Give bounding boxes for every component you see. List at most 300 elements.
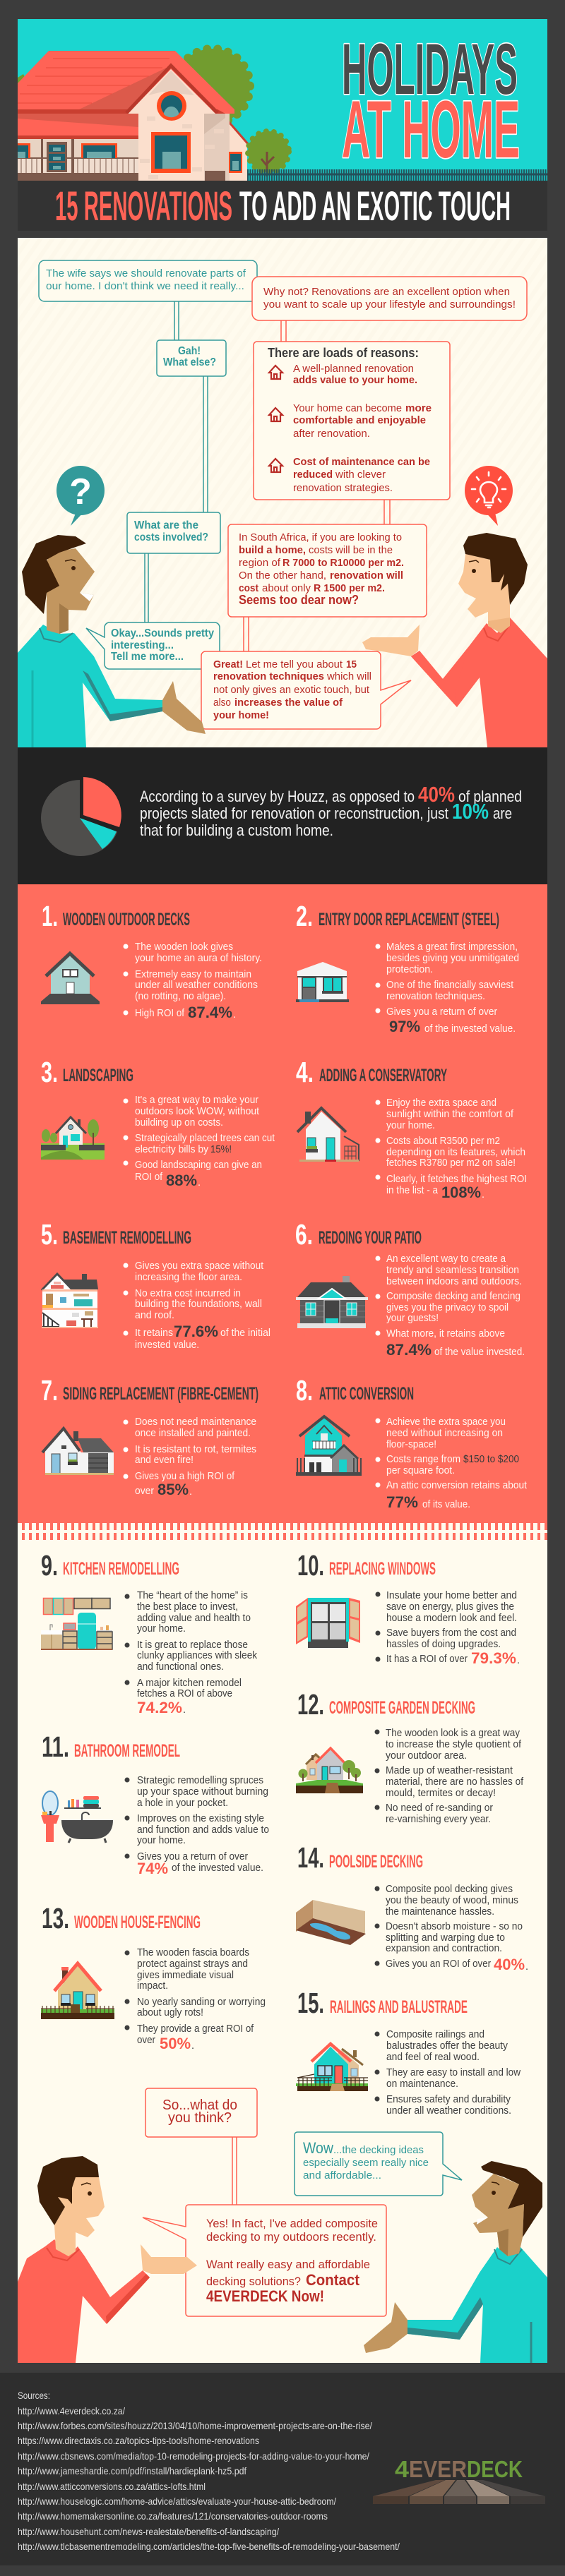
bullets: .: [189, 1486, 192, 1498]
icon: grey house: [296, 1276, 368, 1328]
title: [342, 29, 520, 175]
bullets: Save buyers from the cost and: [386, 1627, 516, 1639]
bullets: [124, 1590, 258, 1716]
icon: garden house: [296, 1748, 363, 1793]
icon: question bubble: ?: [69, 471, 92, 512]
bullets: and functional ones.: [137, 1661, 224, 1673]
bullets: sunlight within the comfort of: [386, 1109, 514, 1120]
callout: reasons: renovation strategies.: [293, 482, 393, 494]
item 2: entry door replacement: 2.: [296, 900, 313, 932]
item 13: wooden house-fencing: WOODEN HOUSE-FENCING: [74, 1913, 201, 1932]
panel: conversation: [18, 238, 547, 747]
item 4: adding a conservatory: [296, 1056, 527, 1201]
bullets: impact.: [137, 1980, 168, 1992]
icon: house with conservatory: [297, 1108, 359, 1162]
text: survey statistic: projects slated for renovation or reconstruction, just: [140, 805, 448, 822]
callout: reasons: comfortable and enjoyable: [293, 414, 426, 426]
bullets: [374, 1884, 528, 1973]
bullets: between indoors and outdoors.: [386, 1276, 522, 1287]
item 5: basement remodelling: [41, 1218, 270, 1351]
item 7: siding replacement: 7.: [41, 1374, 58, 1407]
text: survey statistic: of planned: [458, 788, 522, 805]
bullets: outdoors look WOW, without: [135, 1106, 259, 1117]
bullets: Ensures safety and durability: [386, 2094, 511, 2105]
bullets: up your space without burning: [137, 1786, 268, 1798]
bullets: The wooden look is a great way: [386, 1728, 521, 1739]
callout: south africa costs: Seems too dear now?: [239, 593, 359, 607]
item 11: bathroom remodel: [41, 1731, 269, 1877]
item 12: composite garden decking: 12.: [297, 1688, 324, 1721]
bullets: protect against strays and: [137, 1958, 248, 1970]
bullets: Does not need maintenance: [135, 1416, 256, 1428]
speech: okay sounds pretty interesting: Tell me more...: [111, 651, 184, 663]
bullets: [376, 941, 519, 1035]
bullets: of the value invested.: [434, 1347, 525, 1358]
bullets: building up on costs.: [135, 1117, 223, 1128]
bullets: of its value.: [422, 1499, 470, 1510]
item 2: entry door replacement: [296, 900, 519, 1035]
bullets: hassles of doing upgrades.: [386, 1639, 501, 1650]
connector: [244, 617, 249, 651]
bullets: One of the financially savviest: [386, 980, 513, 991]
bullets: Gives you a high ROI of: [135, 1471, 235, 1482]
callout: reasons: A well-planned renovation: [293, 363, 414, 375]
item 5: basement remodelling: BASEMENT REMODELLING: [63, 1228, 191, 1248]
item 8: attic conversion: 8.: [296, 1374, 313, 1407]
item 7: siding replacement: SIDING REPLACEMENT (FIBRE-CEMENT): [63, 1384, 258, 1404]
bullets: (no rotting, no algae).: [135, 991, 226, 1002]
callout: reasons: There are loads of reasons:: [268, 346, 419, 360]
sources list: http://www.jameshardie.com/pdf/install/hardieplank-hz5.pdf: [18, 2465, 246, 2476]
bullets: .: [198, 1177, 201, 1188]
bullets: .: [191, 2040, 194, 2052]
sources list: http://www.4everdeck.co.za/: [18, 2405, 125, 2416]
speech: gah: [157, 340, 226, 376]
text: survey statistic: According to a survey by Houzz, as opposed to: [140, 788, 415, 805]
bullets: adding value and health to: [137, 1613, 251, 1624]
callout: south africa costs: R 7000 to R10000 per m2.: [282, 557, 404, 569]
bullets: [376, 1253, 525, 1359]
bullets: invested value.: [135, 1340, 199, 1351]
callout: reasons: with clever: [335, 469, 386, 481]
bullets: fetches a ROI of above: [137, 1688, 232, 1699]
subtitle band: 15 RENOVATIONS: [55, 183, 232, 229]
bullets: to increase the style quotient of: [386, 1739, 522, 1750]
speech: great 15 techniques: your home!: [213, 709, 269, 721]
bullets: Costs about R3500 per m2: [386, 1136, 500, 1147]
bullets: under all weather conditions: [135, 980, 258, 991]
item 8: attic conversion: ATTIC CONVERSION: [319, 1384, 414, 1404]
bullets: [123, 1260, 270, 1351]
speech: wow the decking ideas: ...the decking ideas: [333, 2144, 424, 2156]
callout: south africa costs: In South Africa, if you are looking to: [239, 531, 402, 543]
speech: okay sounds pretty interesting: interesting...: [111, 639, 174, 651]
text: survey statistic: [140, 782, 522, 839]
sources list: http://www.househunt.com/news-realestate/benefits-of-landscaping/: [18, 2526, 279, 2537]
item 3: landscaping: [41, 1056, 275, 1189]
bullets: and roof.: [135, 1310, 174, 1321]
bullets: [123, 1416, 256, 1498]
bullets: [374, 2029, 521, 2117]
speech: yes contact 4everdeck: decking to my outdoors recently.: [206, 2230, 376, 2244]
bullets: mould, termites or decay!: [386, 1788, 496, 1799]
sources list: http://www.cbsnews.com/media/top-10-remodeling-projects-for-adding-value-to-your-home/: [18, 2450, 369, 2462]
sources list: https://www.directaxis.co.za/topics-tips-tools/home-renovations: [18, 2435, 259, 2446]
text: survey statistic: 10%: [452, 799, 489, 824]
bullets: of the initial: [220, 1328, 270, 1339]
bullets: of the invested value.: [172, 1862, 263, 1874]
bullets: .: [233, 1009, 236, 1021]
bullets: 74%: [137, 1860, 168, 1877]
icon: bathroom: [41, 1791, 113, 1843]
bullets: your guests!: [386, 1313, 439, 1324]
speech: yes contact 4everdeck: Yes! In fact, I've added composite: [206, 2217, 378, 2230]
logo: 4everdeck: [373, 2456, 545, 2504]
item 5: basement remodelling: 5.: [41, 1218, 58, 1251]
icon: kitchen: [41, 1598, 112, 1650]
callout: reasons: reduced: [293, 469, 333, 481]
speech: great 15 techniques: increases the value of: [234, 697, 343, 709]
bullets: your outdoor area.: [386, 1750, 467, 1762]
person: man in red shirt: [362, 533, 547, 747]
bullets: .: [183, 1704, 186, 1716]
speech: yes contact 4everdeck: Contact: [306, 2271, 360, 2289]
callout: reasons: Your home can become: [293, 402, 402, 414]
bullets: [376, 1416, 527, 1511]
bullets: Good landscaping can give an: [135, 1160, 262, 1171]
connector: [281, 320, 286, 342]
speech: wow the decking ideas: and affordable...: [303, 2169, 381, 2181]
text: survey statistic: that for building a custom home.: [140, 821, 333, 839]
bullets: your home.: [137, 1835, 186, 1846]
item 3: landscaping: 3.: [41, 1056, 58, 1088]
icon: house: [269, 366, 282, 379]
bullets: your home.: [386, 1120, 435, 1131]
bullets: Made up of weather-resistant: [386, 1765, 513, 1776]
bullets: 77.6%: [174, 1323, 218, 1340]
bullets: you the beauty of wood, minus: [386, 1895, 518, 1906]
bullets: It's a great way to make your: [135, 1095, 258, 1106]
icon: house: [269, 459, 282, 472]
bullets: building the foundations, wall: [135, 1299, 262, 1310]
bullets: They provide a great ROI of: [137, 2023, 254, 2035]
bullets: $150 to $200: [463, 1454, 519, 1465]
speech: why not: [252, 277, 527, 320]
bullets: about ugly rots!: [137, 2007, 203, 2018]
callout: south africa costs: cost: [239, 582, 258, 594]
bullets: [123, 941, 262, 1021]
speech: okay sounds pretty interesting: [86, 622, 220, 669]
bullets: [123, 1095, 275, 1189]
bullets: per square foot.: [386, 1465, 455, 1476]
bullets: house a modern look and feel.: [386, 1613, 517, 1624]
bullets: 77%: [386, 1493, 418, 1511]
bullets: depending on its features, which: [386, 1147, 525, 1158]
sources list: http://www.homemakersonline.co.za/features/121/conservatories-outdoor-rooms: [18, 2510, 328, 2522]
bullets: It has a ROI of over: [386, 1654, 468, 1665]
bullets: [376, 1590, 520, 1667]
bullets: 15%!: [210, 1144, 232, 1155]
logo: 4everdeck: 4: [395, 2456, 410, 2482]
callout: south africa costs: region of: [239, 557, 281, 569]
item 9: kitchen remodelling: [41, 1549, 258, 1716]
bullets: [376, 1097, 527, 1201]
speech: the wife says: The wife says we should renovate parts of: [46, 267, 246, 279]
bullets: An excellent way to create a: [386, 1253, 506, 1265]
panel: renovations 1 to 8: [18, 884, 547, 1540]
bullets: under all weather conditions.: [386, 2105, 511, 2117]
sources list: http://www.houselogic.com/home-advice/attics/evaluate-your-house-attic-bedroom/: [18, 2496, 336, 2507]
bullets: Extremely easy to maintain: [135, 969, 251, 980]
callout: reasons: Cost of maintenance can be: [293, 456, 430, 468]
bullets: 108%: [441, 1184, 481, 1201]
connector: [232, 2137, 237, 2205]
icon: fenced house: [41, 1963, 114, 2019]
item 14: poolside decking: 14.: [297, 1841, 324, 1874]
speech: gah: Gah!: [178, 345, 201, 357]
text: survey statistic: are: [493, 805, 512, 822]
connector: [174, 301, 179, 340]
bullets: gives immediate visual: [137, 1970, 234, 1981]
speech: wow the decking ideas: [295, 2132, 462, 2196]
item 4: adding a conservatory: 4.: [296, 1056, 314, 1088]
bullets: .: [517, 1655, 520, 1666]
item 12: composite garden decking: [296, 1688, 524, 1825]
speech: great 15 techniques: renovation techniques: [213, 670, 324, 682]
bullets: need without increasing on: [386, 1428, 503, 1439]
item 1: wooden outdoor decks: WOODEN OUTDOOR DECKS: [63, 910, 190, 929]
speech: great 15 techniques: Let me tell you about: [246, 658, 343, 670]
bullets: Composite decking and fencing: [386, 1291, 521, 1302]
bullets: Achieve the extra space you: [386, 1416, 506, 1428]
connector: [145, 553, 148, 622]
bullets: 87.4%: [386, 1341, 432, 1359]
speech: so what do you think: you think?: [168, 2110, 232, 2126]
connector: [203, 376, 208, 512]
bullets: Gives you extra space without: [135, 1260, 263, 1272]
speech: wow the decking ideas: especially seem really nice: [303, 2157, 429, 2169]
icon: house with garage: [42, 1428, 114, 1475]
bullets: Strategic remodelling spruces: [137, 1775, 263, 1786]
speech: wow the decking ideas: Wow: [303, 2139, 333, 2157]
bullets: and feel of real wood.: [386, 2052, 480, 2063]
bullets: An attic conversion retains about: [386, 1480, 527, 1491]
bullets: 40%: [494, 1956, 525, 1973]
bullets: once installed and painted.: [135, 1428, 251, 1439]
bullets: fetches R3780 per m2 on sale!: [386, 1157, 516, 1169]
bullets: It retains: [135, 1328, 173, 1339]
bullets: and even fire!: [135, 1455, 194, 1466]
item 11: bathroom remodel: BATHROOM REMODEL: [74, 1741, 180, 1761]
bullets: What more, it retains above: [386, 1328, 505, 1340]
bullets: floor-space!: [386, 1439, 436, 1450]
speech: why not: you want to scale up your lifestyle and surroundings!: [263, 299, 516, 311]
pie chart: [41, 777, 127, 856]
item 10: replacing windows: [296, 1549, 520, 1667]
item 6: redoing your patio: 6.: [295, 1218, 313, 1251]
bullets: Gives you a return of over: [386, 1006, 497, 1018]
icon: house cutaway: [42, 1274, 98, 1328]
bullets: .: [525, 1961, 528, 1973]
person: man in teal shirt, bottom: [364, 2161, 547, 2363]
bullets: renovation techniques.: [386, 991, 485, 1002]
speech: yes contact 4everdeck: 4EVERDECK Now!: [206, 2287, 324, 2305]
bullets: 97%: [389, 1018, 420, 1035]
bullets: It is resistant to rot, termites: [135, 1444, 256, 1455]
bullets: trendy and seamless transition: [386, 1265, 519, 1276]
bullets: material, there are no hassles of: [386, 1776, 524, 1788]
callout: south africa costs: R 1500 per m2.: [314, 582, 385, 594]
bullets: [124, 1775, 269, 1877]
bullets: ROI of: [135, 1172, 163, 1183]
panel: renovations 9 to 15: [18, 1523, 547, 2363]
bullets: No extra cost incurred in: [135, 1288, 241, 1299]
bullets: splitting and warping due to: [386, 1932, 505, 1944]
person: man in red shirt, bottom: [18, 2156, 197, 2363]
speech: great 15 techniques: which will: [326, 670, 371, 682]
sources list: http://www.tlcbasementremodeling.com/articles/the-top-five-benefits-of-remodeling-your-basement/: [18, 2541, 400, 2552]
item 9: kitchen remodelling: 9.: [41, 1549, 58, 1582]
speech: so what do you think: So...what do: [162, 2097, 237, 2113]
bullets: your home.: [137, 1623, 186, 1635]
bullets: a hole in your pocket.: [137, 1798, 228, 1809]
speech: great 15 techniques: 15: [346, 658, 357, 670]
sources list: Sources:: [18, 2390, 50, 2401]
bullets: gives you the privacy to spoil: [386, 1302, 509, 1313]
item 6: redoing your patio: REDOING YOUR PATIO: [319, 1228, 422, 1248]
icon: pool deck: [296, 1900, 366, 1945]
panel: survey: [18, 747, 547, 884]
bullets: A major kitchen remodel: [137, 1678, 242, 1689]
sources list: [18, 2390, 400, 2552]
sources list: http://www.forbes.com/sites/houzz/2013/04/10/home-improvement-projects-are-on-the-rise/: [18, 2420, 372, 2431]
bullets: Costs range from: [386, 1454, 460, 1465]
item 4: adding a conservatory: ADDING A CONSERVATORY: [319, 1066, 447, 1085]
subtitle band: [18, 181, 547, 231]
bullets: electricity bills by: [135, 1144, 209, 1155]
bullets: No yearly sanding or worrying: [137, 1997, 266, 2008]
callout: reasons: adds value to your home.: [293, 374, 417, 386]
bullets: Clearly, it fetches the highest ROI: [386, 1174, 527, 1185]
item 14: poolside decking: [296, 1841, 528, 1973]
bullets: 74.2%: [137, 1699, 182, 1716]
bullets: Insulate your home better and: [386, 1590, 517, 1601]
bullets: expansion and contraction.: [386, 1943, 502, 1954]
bullets: 85%: [157, 1481, 189, 1498]
bullets: the maintenance hassles.: [386, 1906, 494, 1918]
bullets: Composite pool decking gives: [386, 1884, 513, 1895]
icon: blue house: [41, 953, 100, 1004]
bullets: balustrades offer the beauty: [386, 2040, 509, 2052]
icon: house: [269, 408, 282, 421]
bullets: Strategically placed trees can cut: [135, 1133, 275, 1144]
text: survey statistic: 40%: [418, 782, 455, 807]
item 3: landscaping: LANDSCAPING: [63, 1066, 133, 1085]
speech: what are the costs: [127, 512, 220, 553]
bullets: on maintenance.: [386, 2078, 458, 2090]
sources list: http://www.atticconversions.co.za/attics-lofts.html: [18, 2481, 206, 2492]
speech: okay sounds pretty interesting: Okay...Sounds pretty: [111, 627, 214, 639]
item 8: attic conversion: [296, 1374, 527, 1511]
icon: house with railings: [296, 2044, 368, 2091]
bullets: Improves on the existing style: [137, 1813, 264, 1824]
speech: great 15 techniques: not only gives an exotic touch, but: [213, 684, 370, 696]
callout: south africa costs: about only: [262, 582, 311, 594]
item 1: wooden outdoor decks: 1.: [42, 900, 58, 932]
person: man in teal shirt: [18, 535, 206, 747]
bullets: Enjoy the extra space and: [386, 1097, 496, 1109]
speech: the wife says: our home. I don't think we need it really...: [46, 280, 244, 292]
callout: reasons: more: [405, 402, 432, 414]
icon: lightbulb bubble: [465, 466, 513, 526]
bullets: of the invested value.: [424, 1023, 516, 1035]
item 10: replacing windows: 10.: [297, 1549, 324, 1582]
bullets: 87.4%: [188, 1004, 232, 1021]
header panel: [18, 19, 547, 181]
bullets: [124, 1947, 266, 2052]
bullets: No need of re-sanding or: [386, 1802, 493, 1814]
item 13: wooden house-fencing: [41, 1902, 266, 2052]
speech: yes contact 4everdeck: decking solutions?: [206, 2275, 301, 2288]
bullets: over: [137, 2035, 155, 2046]
item 7: siding replacement: [41, 1374, 258, 1498]
logo: 4everdeck: DECK: [467, 2456, 523, 2482]
callout: south africa costs: costs will be in the: [309, 544, 393, 556]
bullets: The wooden fascia boards: [137, 1947, 249, 1958]
bullets: 79.3%: [471, 1649, 516, 1667]
speech: great 15 techniques: [201, 651, 411, 729]
bullets: Gives you an ROI of over: [386, 1958, 491, 1970]
icon: teal house with attic balcony: [296, 1416, 362, 1476]
item 6: redoing your patio: [295, 1218, 525, 1359]
bullets: clunky appliances with sleek: [137, 1650, 258, 1661]
speech: yes contact 4everdeck: [143, 2205, 386, 2316]
item 14: poolside decking: POOLSIDE DECKING: [329, 1852, 423, 1872]
item 9: kitchen remodelling: KITCHEN REMODELLING: [63, 1559, 179, 1579]
bullets: Makes a great first impression,: [386, 941, 518, 953]
item 15: railings and balustrade: 15.: [297, 1987, 324, 2019]
speech: why not: Why not? Renovations are an excellent option when: [263, 286, 510, 298]
bullets: 50%: [160, 2035, 191, 2052]
callout: reasons: after renovation.: [293, 428, 370, 440]
bullets: The wooden look gives: [135, 941, 233, 953]
bullets: Doesn't absorb moisture - so no: [386, 1921, 523, 1932]
bullets: your home an aura of history.: [135, 953, 262, 964]
bullets: .: [482, 1189, 484, 1200]
bullets: protection.: [386, 964, 433, 975]
bullets: over: [135, 1486, 154, 1497]
item 13: wooden house-fencing: 13.: [42, 1902, 69, 1934]
bullets: the best place to invest,: [137, 1601, 238, 1613]
bullets: 88%: [166, 1172, 197, 1189]
speech: gah: What else?: [163, 356, 216, 368]
bullets: They are easy to install and low: [386, 2067, 521, 2078]
callout: south africa costs: [228, 524, 427, 617]
bullets: Gives you a return of over: [137, 1851, 248, 1862]
bullets: besides giving you unmitigated: [386, 953, 519, 964]
bullets: increasing the floor area.: [135, 1272, 242, 1283]
speech: what are the costs: costs involved?: [134, 531, 208, 543]
item 15: railings and balustrade: [296, 1987, 521, 2117]
callout: reasons: [254, 342, 450, 500]
bullets: [374, 1728, 524, 1825]
footer panel: [0, 2373, 565, 2565]
speech: yes contact 4everdeck: Want really easy and affordable: [206, 2258, 370, 2271]
callout: south africa costs: renovation will: [330, 570, 403, 582]
speech: great 15 techniques: also: [213, 697, 231, 709]
illustration: house with trees and fence: [18, 49, 547, 181]
speech: the wife says: [39, 260, 257, 301]
